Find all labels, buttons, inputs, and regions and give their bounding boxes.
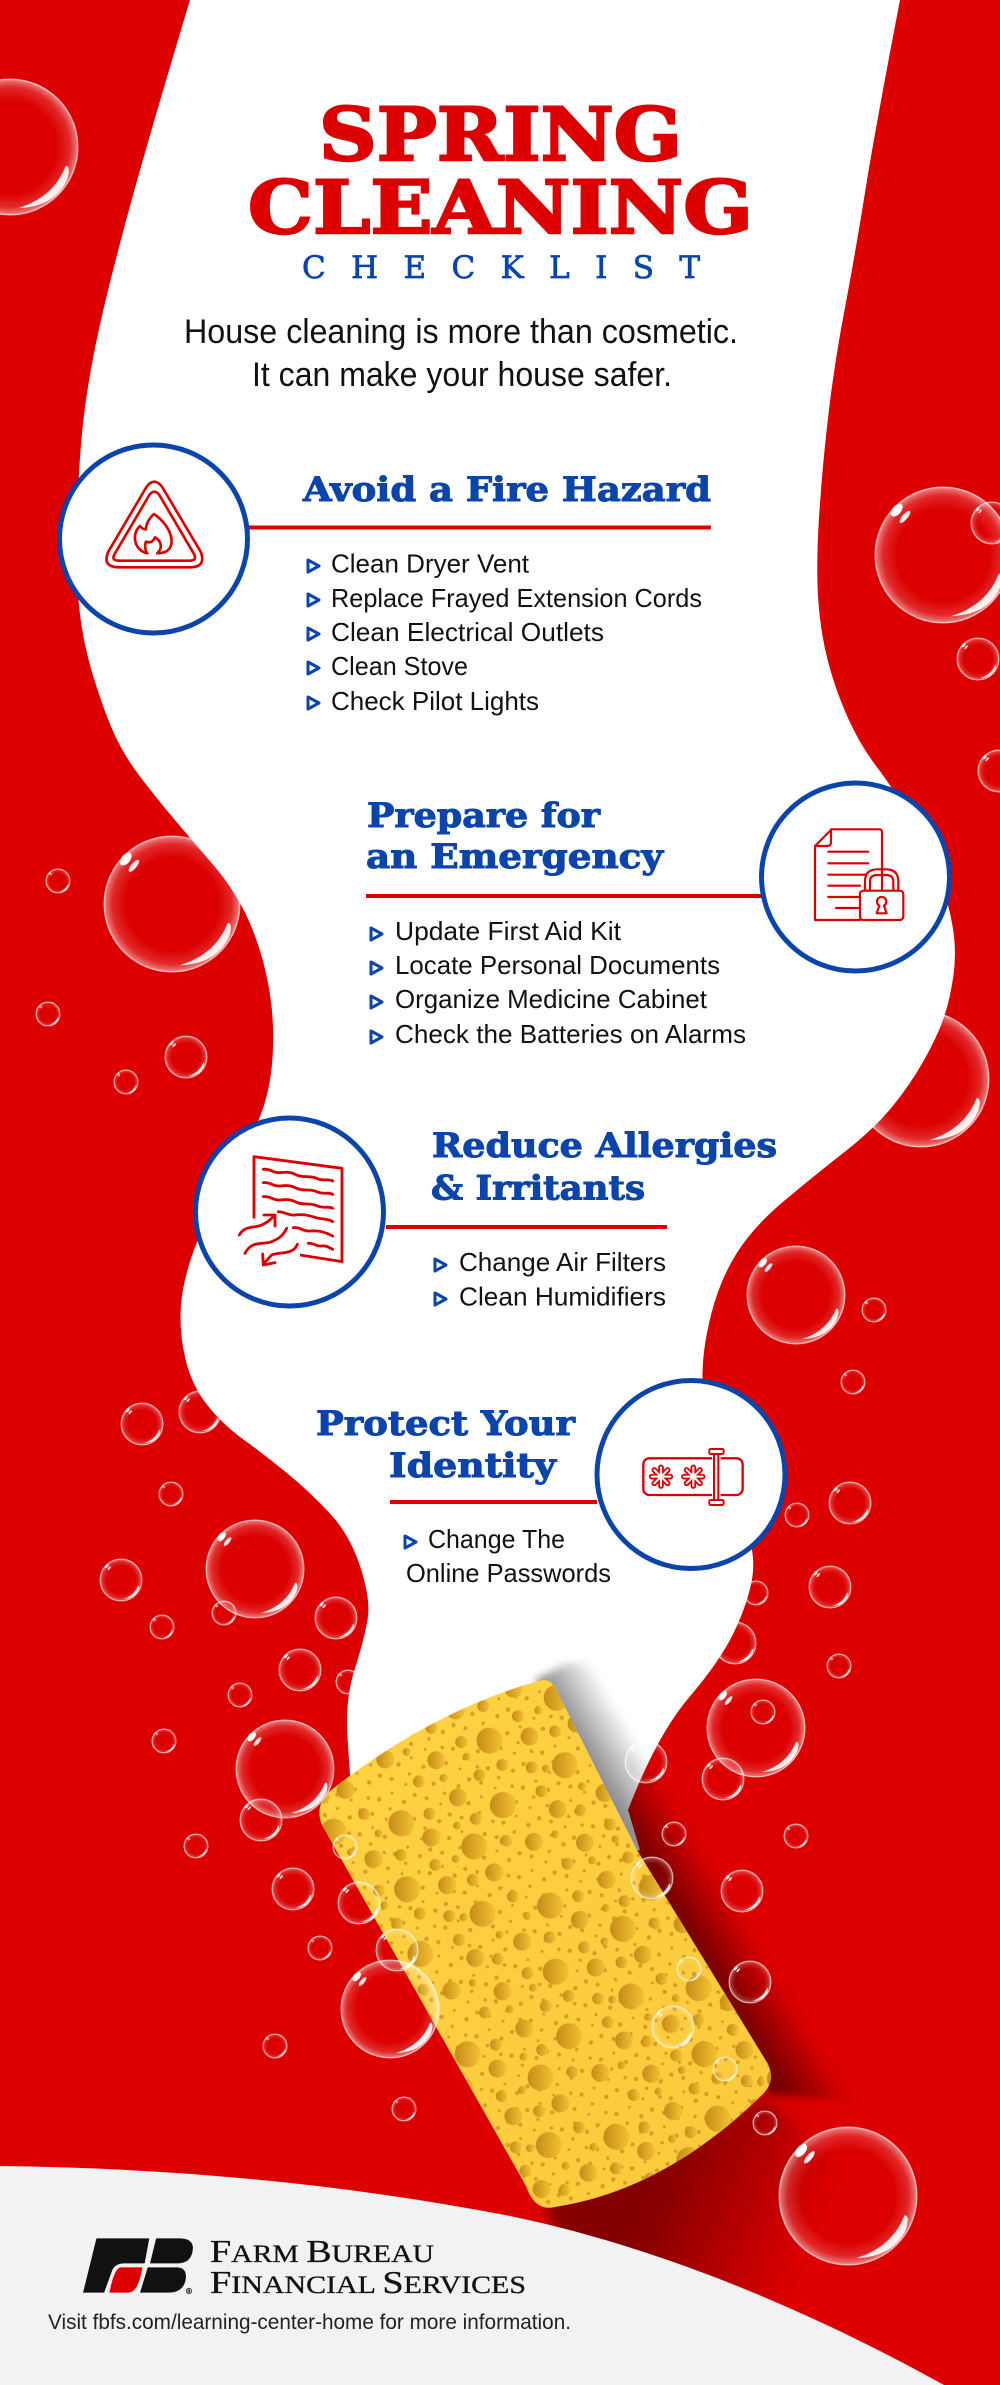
checklist: Clean Dryer Vent — [331, 548, 530, 578]
heading: an Emergency — [366, 837, 664, 877]
checklist: Change The — [428, 1524, 565, 1554]
checklist — [371, 916, 746, 1049]
icon: fire warning triangle — [60, 445, 248, 633]
checklist — [308, 548, 702, 716]
checklist — [435, 1247, 666, 1312]
heading: Reduce Allergies — [432, 1126, 777, 1166]
panel: protect your identity — [316, 1380, 785, 1588]
checklist: Organize Medicine Cabinet — [395, 984, 708, 1014]
checklist: Online Passwords — [406, 1558, 611, 1588]
company name: FARM BUREAU — [210, 2233, 434, 2269]
checklist: Check Pilot Lights — [331, 686, 539, 716]
panel: prepare for an emergency — [366, 783, 950, 1049]
heading: Avoid a Fire Hazard — [302, 470, 711, 510]
panel: avoid a fire hazard — [60, 445, 711, 716]
title: SPRING — [319, 92, 682, 178]
checklist: Clean Humidifiers — [459, 1282, 666, 1312]
icon: password field — [597, 1380, 785, 1568]
yellow sponge — [319, 1680, 771, 2208]
logo: farm bureau mark — [83, 2238, 193, 2293]
checklist: Check the Batteries on Alarms — [395, 1019, 746, 1049]
sponge shadow — [535, 1662, 850, 2300]
checklist: Clean Electrical Outlets — [331, 617, 604, 647]
heading: & Irritants — [431, 1168, 645, 1208]
checklist: Locate Personal Documents — [395, 950, 720, 980]
panel: reduce allergies and irritants — [196, 1118, 777, 1312]
heading — [366, 796, 664, 877]
heading — [431, 1126, 777, 1208]
company name: ® — [186, 2287, 192, 2296]
heading: Prepare for — [367, 796, 601, 836]
checklist — [405, 1524, 611, 1588]
icon: air filter — [196, 1118, 384, 1306]
checklist: Change Air Filters — [459, 1247, 666, 1277]
title: CLEANING — [248, 165, 753, 251]
title — [248, 92, 753, 286]
icon: document and padlock — [762, 783, 950, 971]
intro text: It can make your house safer. — [252, 356, 672, 394]
checklist: Replace Frayed Extension Cords — [331, 583, 702, 613]
checklist: Clean Stove — [331, 651, 468, 681]
website line: Visit fbfs.com/learning-center-home for more information. — [48, 2311, 571, 2334]
footer band — [0, 2166, 944, 2385]
heading — [316, 1404, 576, 1486]
checklist: Update First Aid Kit — [395, 916, 622, 946]
heading: Identity — [389, 1446, 557, 1486]
company name: FINANCIAL SERVICES — [210, 2264, 526, 2300]
intro text: House cleaning is more than cosmetic. — [184, 313, 738, 351]
company name — [186, 2233, 526, 2300]
intro text — [184, 313, 738, 394]
white swoosh path — [76, 0, 955, 1900]
heading: Protect Your — [316, 1404, 576, 1444]
title: CHECKLIST — [302, 250, 700, 286]
